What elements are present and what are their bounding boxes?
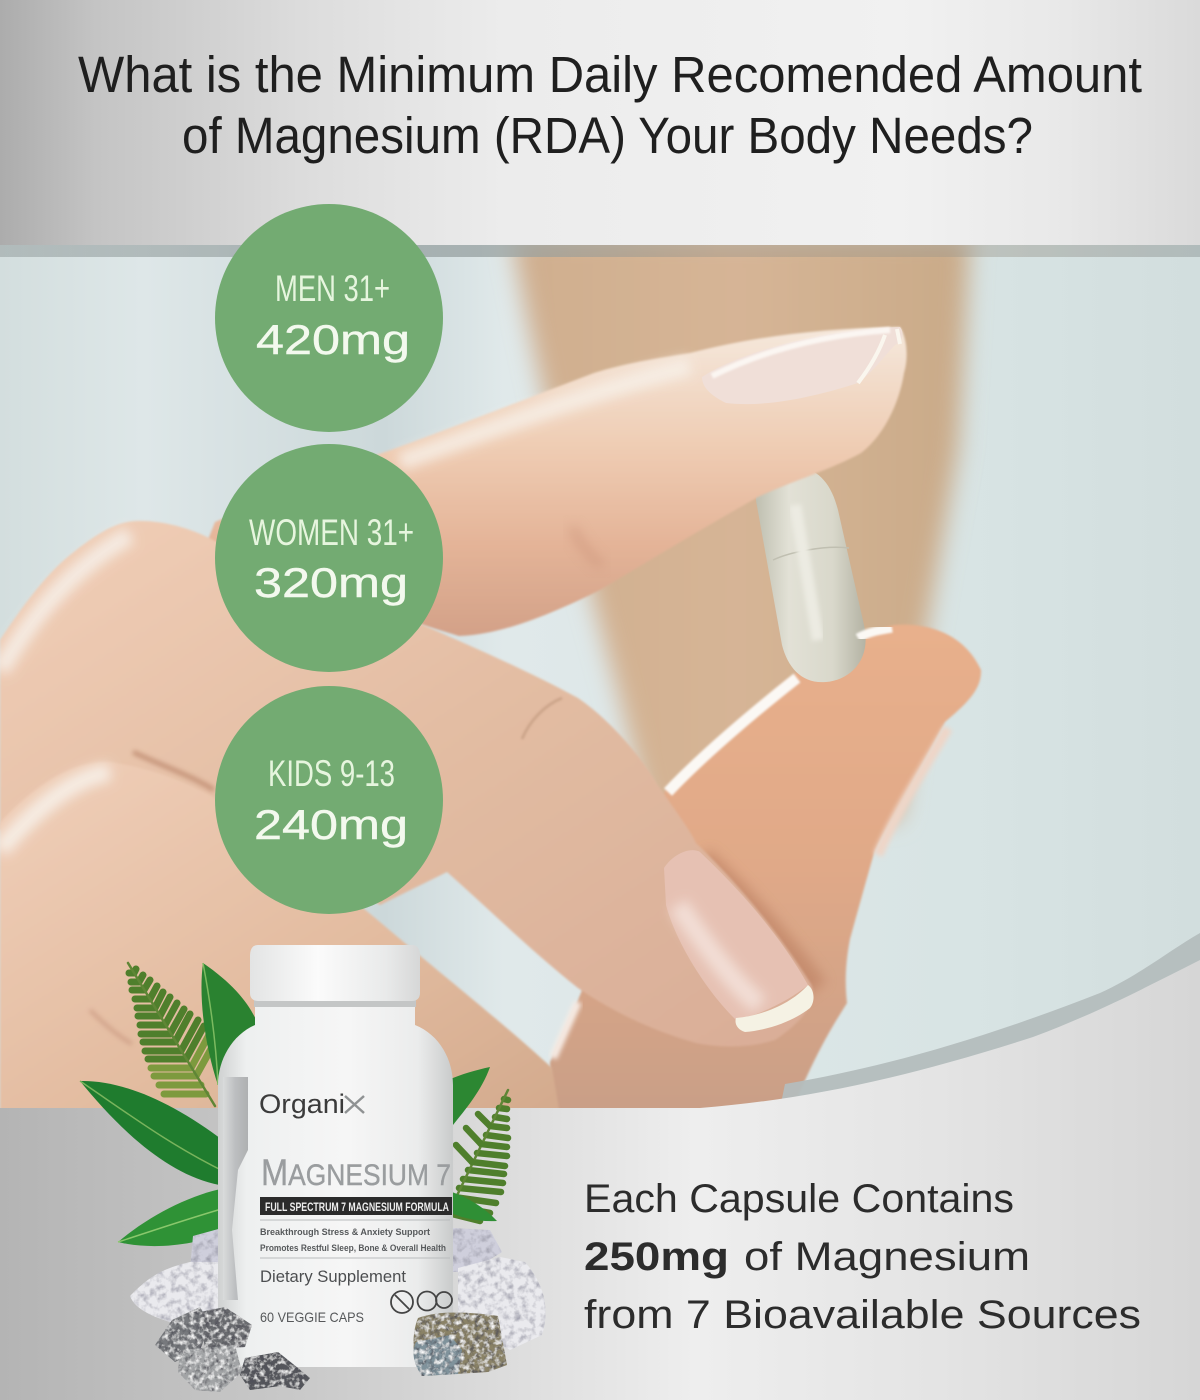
- photo background: [0, 235, 1200, 1120]
- formula band: FULL SPECTRUM 7 MAGNESIUM FORMULA: [265, 1200, 449, 1214]
- leaf lower left: [118, 1188, 225, 1246]
- thumb lower highlight: [553, 1002, 578, 1058]
- silver rocks behind bottle: [130, 1228, 546, 1350]
- thumb shadow: [700, 860, 815, 990]
- capsule content text: 250mg: [584, 1235, 729, 1279]
- middle nail tip: [735, 985, 814, 1032]
- circle: kids: [215, 686, 443, 914]
- capsule content text: of Magnesium: [744, 1235, 1030, 1279]
- leaf top: [201, 963, 258, 1085]
- count: 60 VEGGIE CAPS: [260, 1309, 364, 1325]
- knuckle crease: [522, 698, 562, 739]
- index finger: [200, 327, 907, 636]
- bottle body: [218, 1000, 453, 1367]
- title: of Magnesium (RDA) Your Body Needs?: [182, 107, 1033, 164]
- thumb pad white arc: [858, 628, 892, 638]
- crease between fingers: [133, 752, 214, 790]
- badges: [391, 1291, 452, 1313]
- thumb highlight stripe: [668, 678, 797, 792]
- dietary supplement: Dietary Supplement: [260, 1267, 406, 1286]
- lower finger: [0, 762, 560, 1115]
- dark rocks: [155, 1307, 310, 1392]
- circle: men: [215, 204, 443, 432]
- capsule content text: from 7 Bioavailable Sources: [584, 1293, 1141, 1337]
- title: [78, 46, 1142, 164]
- benefits: [260, 1227, 446, 1254]
- middle finger: [0, 521, 813, 1046]
- botanicals behind bottle: [80, 963, 508, 1246]
- circle: kids: 240mg: [254, 801, 408, 848]
- circle: kids: KIDS 9-13: [268, 753, 395, 794]
- bottle: [218, 945, 453, 1367]
- silver label strip: [223, 1077, 248, 1300]
- leaf right bottom: [445, 1190, 497, 1221]
- circle: women: WOMEN 31+: [249, 512, 414, 553]
- fern right: [450, 1090, 508, 1221]
- palm crease: [90, 1010, 132, 1044]
- lower finger highlight: [0, 772, 110, 850]
- circle: women: 320mg: [254, 559, 408, 606]
- capsule content text: Each Capsule Contains: [584, 1177, 1014, 1221]
- pyrite rock: [413, 1312, 507, 1376]
- benefits: Breakthrough Stress & Anxiety Support: [260, 1227, 431, 1238]
- fern left: [128, 963, 216, 1106]
- leaf right top: [448, 1067, 490, 1125]
- title: What is the Minimum Daily Recomended Amount: [78, 46, 1142, 103]
- benefits: Promotes Restful Sleep, Bone & Overall Health: [260, 1243, 446, 1254]
- index highlight: [400, 366, 690, 462]
- capsule content text: [584, 1177, 1141, 1337]
- nail tip edge: [858, 329, 900, 383]
- middle fingernail: [664, 850, 808, 1020]
- brand: Organi: [259, 1089, 345, 1119]
- circle: women: [215, 444, 443, 672]
- nail highlight: [712, 330, 890, 376]
- formula band: [260, 1197, 452, 1215]
- thumb: [550, 625, 981, 1115]
- thumb right edge: [878, 728, 948, 855]
- bottle neck shadow: [254, 1000, 416, 1007]
- brand mark: [345, 1096, 364, 1113]
- bottle cap: [250, 945, 420, 1001]
- divider lines: [260, 1220, 450, 1258]
- nail highlight: [678, 905, 760, 1005]
- circle: men: 420mg: [256, 316, 410, 363]
- bottom silver panel: [0, 933, 1200, 1400]
- index fingernail: [702, 327, 902, 404]
- product name: MAGNESIUM 7: [261, 1152, 451, 1193]
- index crease: [572, 527, 602, 566]
- photo: hand holding capsule: [0, 327, 981, 1115]
- circle: men: MEN 31+: [275, 268, 390, 309]
- middle finger highlight: [0, 535, 130, 670]
- capsule: [756, 466, 866, 682]
- header panel: [0, 0, 1200, 257]
- leaf large left: [80, 1081, 225, 1186]
